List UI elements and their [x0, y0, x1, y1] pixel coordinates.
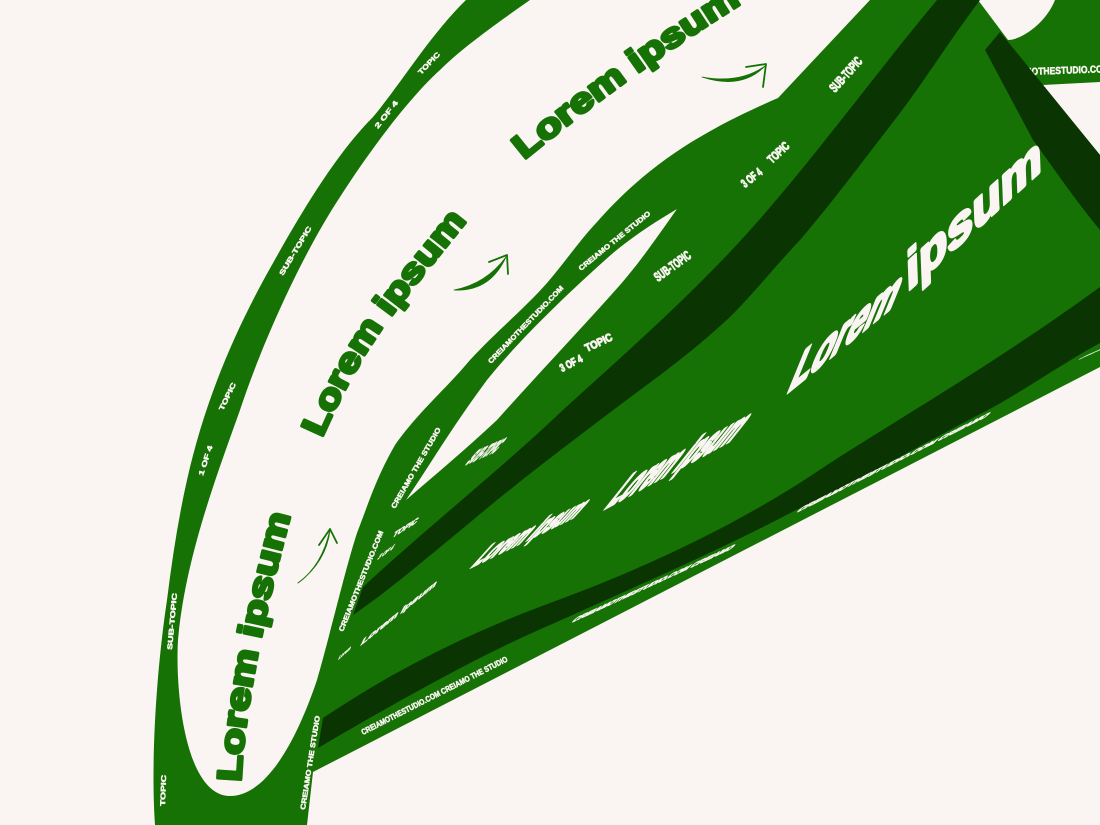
heading: Lorem ipsum 1: Lorem ipsum	[216, 512, 292, 781]
warped: sub-topic: SUB-TOPIC	[651, 247, 694, 284]
label: topic: TOPIC	[160, 775, 168, 806]
dark band: upper diagonal	[353, 0, 980, 615]
band label: studio: CREIAMO THE STUDIO	[391, 426, 443, 510]
warped: topic: TOPIC	[390, 516, 420, 541]
arrow 3	[702, 64, 766, 87]
heading: white ipsum: ipsum	[905, 122, 1042, 304]
arrow 2	[454, 255, 508, 290]
warped: topic: TOPIC	[764, 139, 792, 166]
dark band: top right	[985, 32, 1100, 230]
band label: studio: CREIAMO THE STUDIO	[578, 210, 653, 273]
label: sub-topic: SUB-TOPIC	[279, 225, 314, 277]
warped: Lorem ipsum middle: Lorem ipsum	[463, 488, 601, 576]
dark band: lower	[318, 287, 1100, 748]
warped: 3 of 4: 3 OF 4	[738, 165, 765, 190]
label: 1 of 4: 1 OF 4	[198, 445, 215, 477]
warped: sub-topic: SUB-TOPIC	[826, 53, 866, 95]
bottom slivers of text	[569, 410, 993, 625]
label: sub-topic: SUB-TOPIC	[167, 593, 179, 650]
arrow 1	[298, 529, 337, 583]
white lens gap	[406, 209, 677, 500]
warped: Lorem small: Lorem	[337, 645, 352, 662]
sliver text 2: CREIAMOTHESTUDIO.COM CREIAMO	[794, 410, 993, 515]
label: topic: TOPIC	[417, 51, 442, 76]
heading: white Lorem: Lorem	[781, 252, 915, 407]
band label: url: CREIAMOTHESTUDIO.COM	[487, 285, 566, 365]
warped: sub-topic: SUB-TOPIC	[460, 434, 510, 470]
label: topic: TOPIC	[219, 382, 238, 412]
warped: Lorem ipsum wide: Lorem ipsum	[595, 397, 766, 520]
bottom strip label: CREIAMOTHESTUDIO.COM CREIAMO THE STUDIO	[360, 655, 509, 737]
warped: topic: TOPIC	[583, 332, 615, 355]
band label: url: CREIAMOTHESTUDIO.COM	[338, 530, 385, 633]
sliver text 1: CREIAMOTHESTUDIO.COM CREIAMO	[569, 542, 738, 625]
warped Lorem ipsum headings	[337, 122, 1042, 662]
warped: 3 of 4: 3 OF 4	[376, 542, 397, 562]
outer arc labels	[160, 51, 442, 806]
band label: studio: CREIAMO THE STUDIO	[300, 715, 322, 810]
warped: Lorem ipsum narrow: Lorem ipsum	[359, 577, 439, 648]
band labels	[300, 210, 653, 810]
heading: Lorem ipsum 2: Lorem ipsum	[300, 212, 468, 438]
label: 2 of 4: 2 OF 4	[374, 100, 400, 130]
warped sub-topic labels	[376, 53, 866, 562]
warped: 3 of 4: 3 OF 4	[558, 353, 585, 375]
